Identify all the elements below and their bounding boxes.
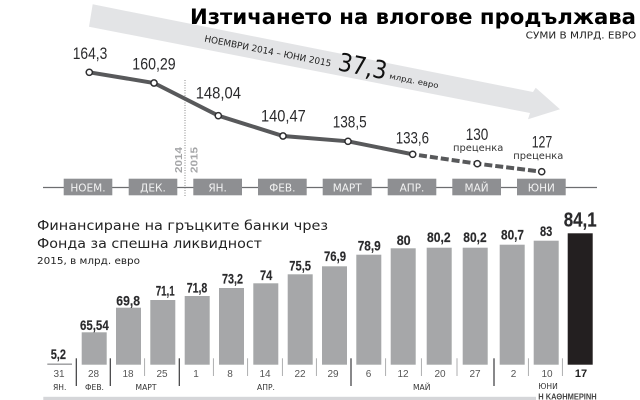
date axis: 28 xyxy=(88,369,99,380)
date axis: МАРТ xyxy=(136,383,157,392)
month axis: МАРТ xyxy=(333,182,362,194)
date axis: 29 xyxy=(327,369,339,380)
bar values: 83 xyxy=(540,223,552,239)
line chart values xyxy=(73,45,563,162)
date axis: 17 xyxy=(575,368,587,380)
bar values: 84,1 xyxy=(564,210,597,232)
bar values: 78,9 xyxy=(358,238,381,254)
date axis: 10 xyxy=(541,369,553,380)
month axis xyxy=(43,179,597,195)
date axis: 12 xyxy=(397,369,409,380)
bar values: 5,2 xyxy=(51,346,66,362)
bar values: 80,2 xyxy=(427,229,451,245)
year label 2014: 2014 xyxy=(173,147,185,173)
arrow: decline banner xyxy=(89,4,560,119)
bar values: 76,9 xyxy=(324,248,346,264)
bar values: 75,5 xyxy=(289,258,311,274)
line chart: deposits xyxy=(86,69,545,175)
bar values: 71,8 xyxy=(187,280,207,296)
line chart values: 130 xyxy=(466,126,488,144)
subtitle: СУМИ В МЛРД. ЕВРО xyxy=(526,31,636,42)
month axis: МАЙ xyxy=(465,182,489,194)
date axis: 14 xyxy=(259,369,271,380)
line chart values: преценка xyxy=(453,143,503,154)
heading: emergency liquidity funding xyxy=(37,218,328,267)
date axis: МАЙ xyxy=(413,383,430,392)
date axis: 20 xyxy=(434,369,446,380)
date axis: 27 xyxy=(469,369,481,380)
date axis: 2 xyxy=(511,369,517,380)
bar chart xyxy=(47,233,593,365)
bar values: 73,2 xyxy=(222,270,243,286)
date axis: 22 xyxy=(294,369,306,380)
year divider xyxy=(173,80,200,196)
date axis: АПР. xyxy=(257,383,275,392)
line chart values: 160,29 xyxy=(132,55,176,73)
heading: emergency liquidity funding: Фонда за спешна ликвидност xyxy=(37,236,262,252)
heading: emergency liquidity funding: 2015, в млрд. евро xyxy=(37,256,140,267)
date axis: ЯН. xyxy=(53,383,66,392)
source bar xyxy=(43,397,536,400)
line chart values: 140,47 xyxy=(261,108,306,126)
month axis: АПР. xyxy=(400,182,424,194)
bar values: 74 xyxy=(260,267,272,283)
bar values: 80,2 xyxy=(463,229,487,245)
month axis: ДЕК. xyxy=(140,182,166,194)
date axis: 8 xyxy=(227,369,233,380)
date axis: ЮНИ xyxy=(538,382,558,391)
date axis: 1 xyxy=(193,369,199,380)
bar values: 65,54 xyxy=(80,317,109,333)
date axis: 6 xyxy=(366,369,372,380)
line chart values: 127 xyxy=(532,133,552,151)
line chart values: преценка xyxy=(513,151,563,162)
year label 2015: 2015 xyxy=(188,147,200,173)
date axis xyxy=(53,358,587,392)
line chart values: 138,5 xyxy=(333,114,367,132)
month axis: ЯН. xyxy=(208,182,227,194)
bar values: 80 xyxy=(397,232,411,248)
bar values: 69,8 xyxy=(116,293,140,309)
date axis: ФЕВ. xyxy=(85,383,104,392)
date axis: 25 xyxy=(156,369,168,380)
line chart values: 133,6 xyxy=(396,129,429,147)
date axis: 18 xyxy=(122,369,134,380)
heading: emergency liquidity funding: Финансиране на гръцките банки чрез xyxy=(37,218,328,234)
line chart values: 148,04 xyxy=(196,85,241,103)
bar values: 80,7 xyxy=(501,226,524,242)
month axis: ЮНИ xyxy=(528,182,555,194)
line chart values: 164,3 xyxy=(73,45,107,63)
arrow text: period: НОЕМВРИ 2014 – ЮНИ 2015 xyxy=(203,35,332,69)
arrow text: unit: млрд. евро xyxy=(389,72,440,90)
arrow text: total: 37,3 xyxy=(336,47,390,85)
title: Изтичането на влогове продължава xyxy=(190,5,636,29)
bar values: 71,1 xyxy=(156,283,175,299)
month axis: НОЕМ. xyxy=(70,182,106,194)
month axis: ФЕВ. xyxy=(269,182,295,194)
date axis: 31 xyxy=(53,369,65,380)
bar values xyxy=(51,210,597,362)
